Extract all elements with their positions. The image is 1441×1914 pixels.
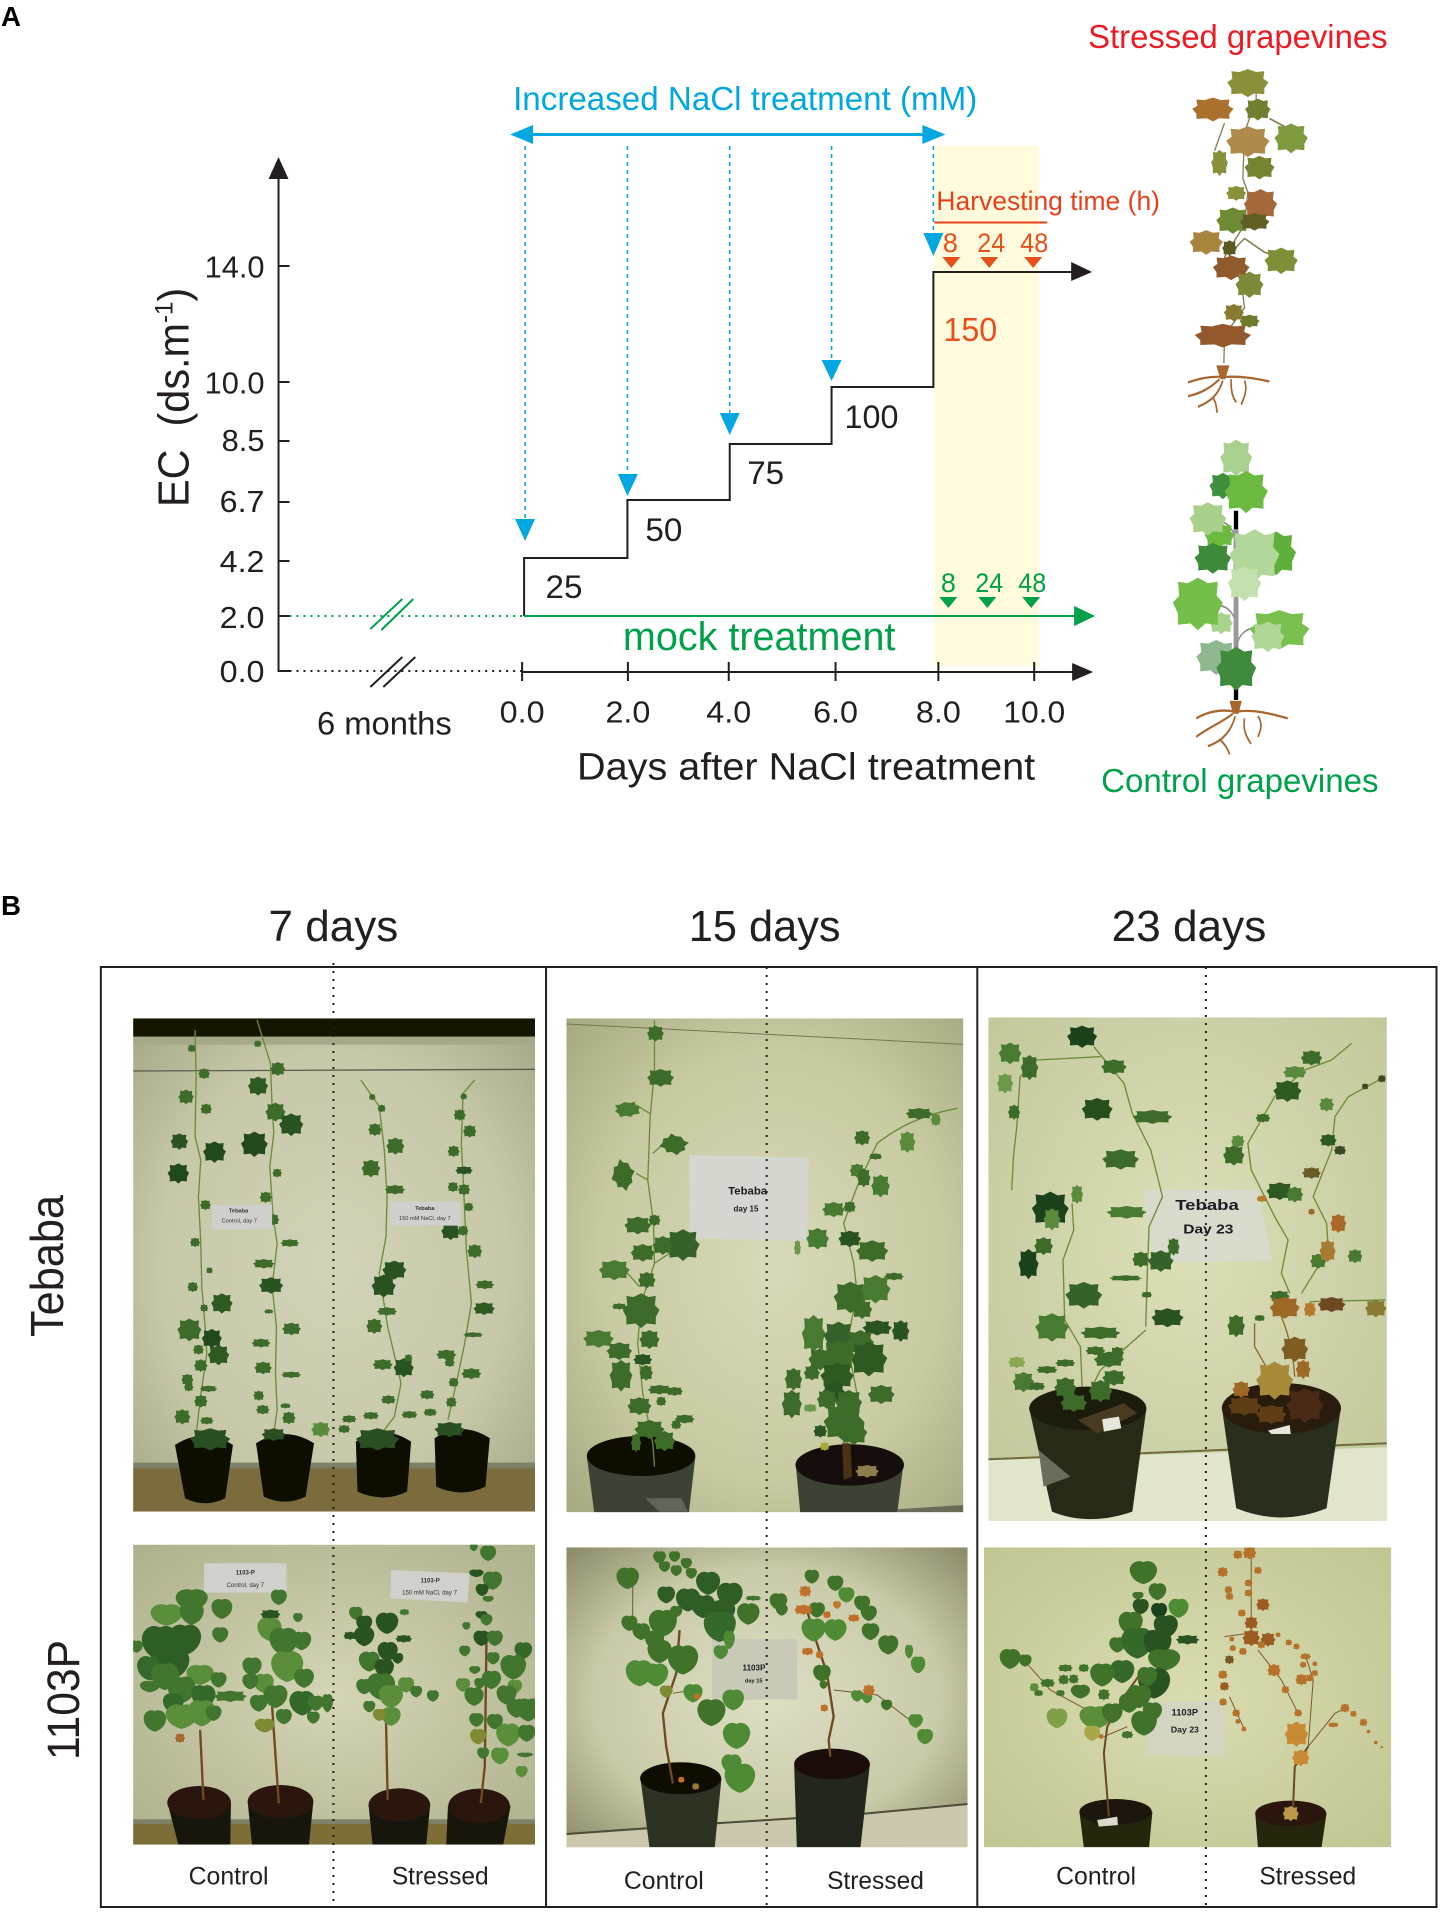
- y axis title: -1: [151, 302, 179, 323]
- stressed harvest markers: 8: [943, 228, 958, 258]
- control harvest markers: 48: [1018, 568, 1046, 598]
- x axis tick labels: 6.0: [813, 694, 858, 730]
- column headings: 7 days: [269, 902, 398, 951]
- column footers: Control and Stressed: Stressed: [1259, 1862, 1356, 1891]
- photo: Tebaba 15 days: day 15: [734, 1205, 759, 1214]
- y axis tick labels: 14.0: [205, 249, 265, 285]
- photo: 1103P 23 days: 1103P: [1172, 1708, 1198, 1718]
- photo: 1103P 23 days: Day 23: [1171, 1725, 1199, 1735]
- photo: 1103P 15 days: [566, 1547, 968, 1847]
- double arrow: [510, 125, 945, 144]
- y axis: [269, 157, 289, 672]
- photo: Tebaba 15 days: Tebaba: [728, 1185, 768, 1197]
- x axis tick labels: 4.0: [706, 694, 751, 730]
- column footers: Control and Stressed: Control: [624, 1867, 704, 1895]
- y axis tick labels: [205, 249, 265, 689]
- photo: Tebaba 23 days: Day 23: [1183, 1222, 1233, 1236]
- x axis: [521, 662, 1093, 681]
- mock treatment line: [524, 606, 1095, 626]
- y axis title: EC (ds.m: [150, 323, 199, 507]
- photo: 1103P 23 days: [984, 1547, 1391, 1847]
- column footers: Control and Stressed: Control: [1056, 1862, 1136, 1891]
- harvest window highlight: [934, 146, 1039, 666]
- stressed harvest markers: 48: [1020, 228, 1048, 258]
- harvesting time label: Harvesting time (h): [936, 186, 1160, 216]
- column footers: Control and Stressed: Stressed: [392, 1862, 489, 1891]
- control grapevines heading: Control grapevines: [1101, 762, 1379, 799]
- y axis tick labels: 2.0: [220, 600, 265, 635]
- x axis tick labels: 2.0: [605, 694, 650, 730]
- photo: 1103P 7 days: Control, day 7: [227, 1583, 265, 1589]
- photo: 1103P 15 days: 1103P: [743, 1664, 766, 1673]
- photo: Tebaba 23 days: [988, 1017, 1387, 1521]
- photo: Tebaba 23 days: Tebaba: [1175, 1198, 1240, 1214]
- y axis tick labels: 6.7: [220, 484, 265, 519]
- column headings: [269, 902, 1266, 951]
- stressed harvest markers: [942, 228, 1048, 268]
- six months label: 6 months: [317, 705, 452, 742]
- photo: 1103P 7 days: 1103-P: [421, 1578, 440, 1584]
- y axis tick labels: 4.2: [220, 544, 265, 579]
- photo: 1103P 15 days: day 15: [745, 1679, 763, 1685]
- y axis tick labels: 8.5: [222, 423, 265, 458]
- control harvest markers: [939, 568, 1046, 608]
- photo: Tebaba 15 days: [566, 1018, 963, 1512]
- panel label A: A: [1, 1, 21, 32]
- stressed harvest markers: 24: [977, 228, 1005, 258]
- salinity staircase: [524, 262, 1092, 616]
- photo: Tebaba 7 days: 150 mM NaCl, day 7: [399, 1216, 451, 1222]
- column headings: 15 days: [689, 902, 841, 951]
- column headings: 23 days: [1112, 902, 1266, 951]
- step values: 25: [546, 569, 582, 605]
- photo: 1103P 7 days: 1103-P: [236, 1571, 255, 1577]
- step values: 75: [747, 455, 784, 491]
- step values: 50: [645, 512, 682, 548]
- x axis tick labels: [500, 694, 1065, 730]
- dashed salt-addition arrows: [515, 146, 943, 541]
- photo: Tebaba 7 days: [133, 1018, 535, 1512]
- control harvest markers: 24: [975, 568, 1003, 598]
- x axis tick labels: 0.0: [500, 694, 545, 730]
- step values: 100: [845, 399, 898, 435]
- control harvest markers: 8: [941, 568, 956, 598]
- mock treatment label: mock treatment: [623, 615, 895, 659]
- x axis tick labels: 8.0: [916, 694, 961, 730]
- row label Tebaba: Tebaba: [22, 1195, 73, 1337]
- photo: Tebaba 7 days: Tebaba: [229, 1209, 249, 1215]
- step values: [546, 399, 898, 605]
- panel A: EC step chart: [150, 80, 1160, 789]
- photo: Tebaba 7 days: Control, day 7: [222, 1218, 257, 1224]
- photo: Tebaba 7 days: Tebaba: [415, 1206, 435, 1212]
- column footers: Control and Stressed: [189, 1862, 1356, 1895]
- column footers: Control and Stressed: Control: [189, 1862, 269, 1891]
- axis breaks: [289, 599, 524, 687]
- frame: photo grid: [101, 967, 1437, 1907]
- x axis title: Days after NaCl treatment: [577, 746, 1036, 789]
- icon: stressed grapevine: [1188, 69, 1308, 413]
- photo: 1103P 7 days: [130, 1543, 540, 1845]
- stressed grapevines heading: Stressed grapevines: [1088, 18, 1388, 55]
- photo: 1103P 7 days: 150 mM NaCl, day 7: [402, 1591, 458, 1597]
- y axis tick labels: 0.0: [220, 654, 265, 689]
- panel label B: B: [1, 890, 21, 921]
- y axis tick labels: 10.0: [205, 365, 265, 401]
- NaCl treatment title: Increased NaCl treatment (mM): [513, 80, 977, 117]
- row label 1103P: 1103P: [38, 1640, 89, 1760]
- x axis tick labels: 10.0: [1003, 694, 1065, 730]
- y axis title: ): [150, 288, 199, 302]
- column dividers: control vs stressed: [333, 963, 1206, 1905]
- icon: control grapevine: [1173, 440, 1309, 754]
- step value 150: 150: [943, 311, 997, 348]
- column footers: Control and Stressed: Stressed: [827, 1867, 924, 1895]
